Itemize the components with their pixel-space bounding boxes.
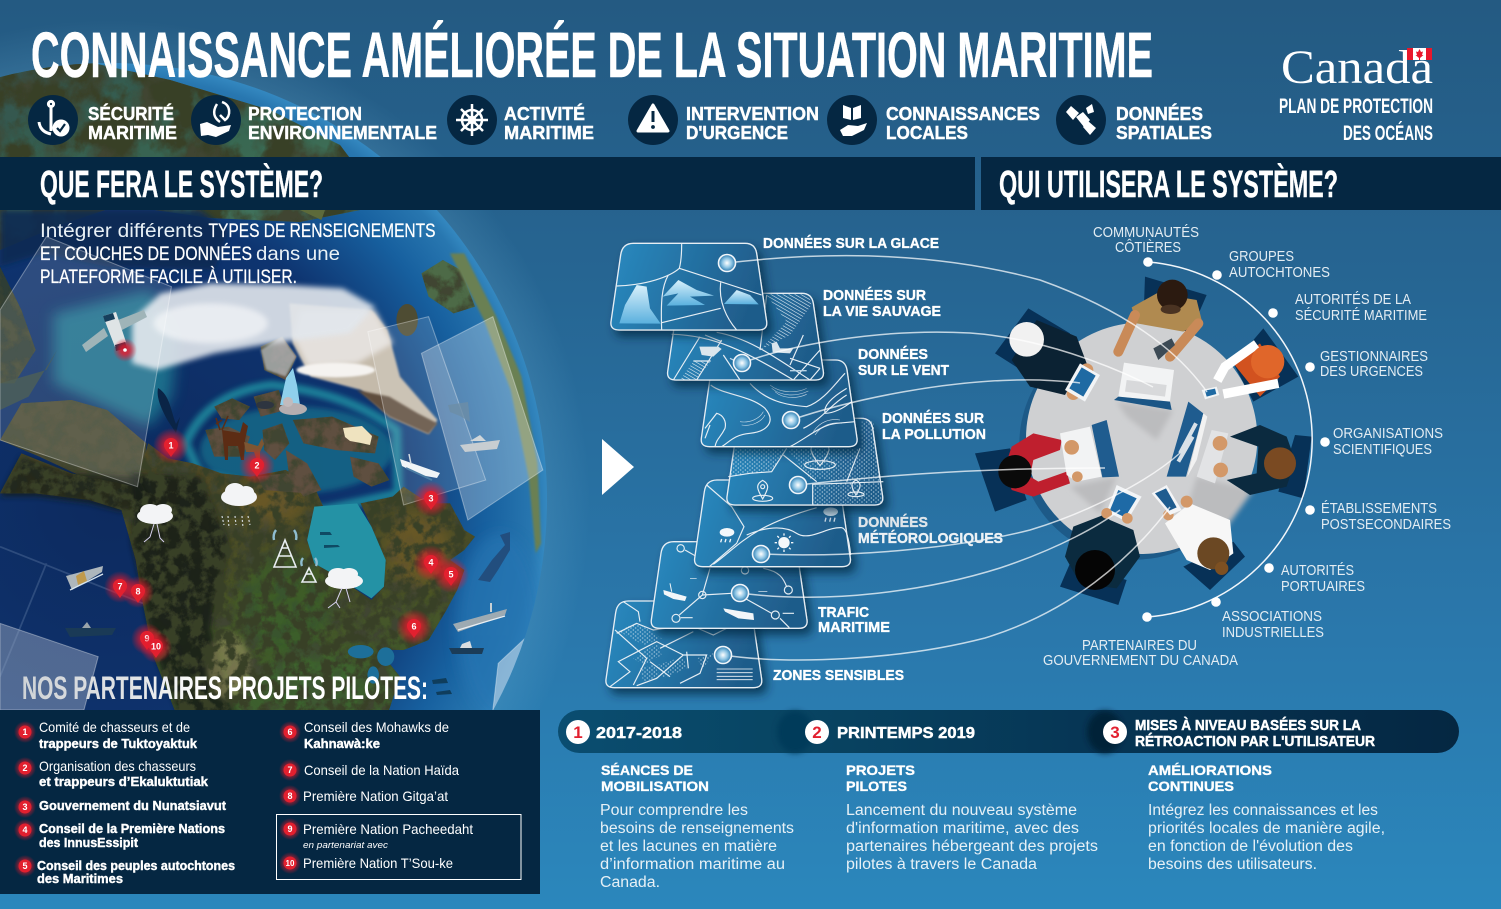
card: données sur le vent <box>701 360 857 447</box>
theme: sécurité maritime <box>28 95 177 145</box>
theme: protection environnementale <box>191 95 437 145</box>
panel: partners list: Première Nation T’Sou-ke <box>303 855 453 871</box>
user labels: COMMUNAUTÉS <box>1093 224 1199 241</box>
step 3: 3 <box>1110 723 1120 742</box>
user labels: INDUSTRIELLES <box>1222 625 1324 641</box>
column: projets pilotes: Lancement du nouveau système <box>846 802 1077 819</box>
theme: activité maritime: MARITIME <box>504 123 594 143</box>
column: séances de mobilisation: MOBILISATION <box>601 778 709 794</box>
panel: partners list: et trappeurs d’Ekaluktutiak <box>39 775 208 789</box>
icon: storm clouds <box>137 483 363 608</box>
logo: Canada wordmark: Canada <box>1281 41 1433 94</box>
layer nodes <box>714 254 806 664</box>
card: trafic maritime <box>651 542 807 628</box>
card: données sur la glace <box>611 243 767 330</box>
step 1: 2017-2018 <box>596 725 682 742</box>
panel: partners list: 2 <box>22 763 28 773</box>
panel: partners list: Organisation des chasseurs <box>39 758 196 774</box>
theme: intervention d'urgence <box>628 95 819 145</box>
column: projets pilotes: partenaires hébergeant des projets <box>846 838 1098 855</box>
theme: activité maritime <box>447 95 594 145</box>
user labels: AUTORITÉS <box>1281 562 1354 579</box>
step 2: PRINTEMPS 2019 <box>837 725 975 742</box>
person: orange hard hat <box>1202 343 1284 399</box>
arrow <box>602 439 634 495</box>
column: améliorations continues: besoins des utilisateurs. <box>1148 856 1317 873</box>
intro text: ET COUCHES DE DONNÉES <box>40 244 252 265</box>
user labels <box>1043 224 1451 669</box>
intro text: Intégrer différents <box>40 221 203 242</box>
person: red sweater <box>998 420 1119 497</box>
step 2: 2 <box>812 723 822 742</box>
panel: partners list: des InnusEssipit <box>39 836 139 850</box>
timeline pill <box>558 710 1459 753</box>
theme: données spatiales <box>1056 95 1212 145</box>
person: black hair <box>1065 485 1142 590</box>
icon: radio towers <box>274 530 317 582</box>
person: white hat officer <box>1009 320 1100 402</box>
column: améliorations continues: priorités locales de manière agile, <box>1148 820 1385 837</box>
step 3: MISES À NIVEAU BASÉES SUR LA <box>1135 717 1361 734</box>
user labels: CÔTIÈRES <box>1115 239 1181 256</box>
column: projets pilotes: PROJETS <box>846 762 915 778</box>
chairs <box>975 277 1312 605</box>
intro text <box>40 221 436 288</box>
banner: que fera le système <box>0 157 975 210</box>
layer labels: LA VIE SAUVAGE <box>823 304 941 320</box>
intro text: TYPES DE RENSEIGNEMENTS <box>208 221 436 242</box>
layer labels: DONNÉES SUR LA GLACE <box>763 235 939 252</box>
card: zones sensibles <box>606 601 762 688</box>
map markers 1 to 10: 2 <box>254 460 260 470</box>
user labels: DES URGENCES <box>1320 364 1423 380</box>
person: dark suit <box>1167 402 1296 495</box>
icon: dark whale arctic <box>158 388 180 433</box>
column: projets pilotes: pilotes à travers le Canada <box>846 856 1037 873</box>
column: projets pilotes: d'information maritime, avec des <box>846 820 1079 837</box>
theme: données spatiales: DONNÉES <box>1116 103 1203 124</box>
panel: partners list: en partenariat avec <box>303 840 389 850</box>
theme: connaissances locales <box>827 95 1040 145</box>
panel: partners list: Gouvernement du Nunatsiavut <box>39 799 227 813</box>
panel: partners list: Première Nation Pacheedaht <box>303 821 473 837</box>
map markers 1 to 10: 1 <box>168 440 174 450</box>
user labels: ASSOCIATIONS <box>1222 609 1322 625</box>
user labels: POSTSECONDAIRES <box>1321 517 1451 533</box>
panel: partners list: 1 <box>22 727 28 737</box>
theme: protection environnementale: ENVIRONNEMENTALE <box>248 123 437 143</box>
panel: partners list: Comité de chasseurs et de <box>39 719 190 735</box>
laptop <box>1114 363 1174 410</box>
person: white shirt <box>1152 485 1233 575</box>
user labels: AUTORITÉS DE LA <box>1295 291 1411 308</box>
icon: walrus and iceberg <box>256 368 307 415</box>
theme: protection environnementale: PROTECTION <box>248 104 362 124</box>
column: améliorations continues: CONTINUES <box>1148 778 1234 794</box>
data layer cards stack <box>606 243 883 688</box>
map markers 1 to 10: 8 <box>135 586 141 596</box>
table <box>1019 323 1257 560</box>
text: plan de protection des océans <box>1279 95 1433 145</box>
panel: partners list: 6 <box>287 727 293 737</box>
globe map of Canada <box>0 44 563 710</box>
panel: partners list: trappeurs de Tuktoyaktuk <box>39 737 197 751</box>
user arc <box>1142 257 1330 622</box>
column: séances de mobilisation: SÉANCES DE <box>601 762 693 778</box>
column: améliorations continues: Intégrez les connaissances et les <box>1148 802 1378 819</box>
card: données sur la vie sauvage <box>668 293 823 380</box>
layer labels: DONNÉES SUR <box>882 410 984 427</box>
layer labels: ZONES SENSIBLES <box>773 668 904 684</box>
step 1: 1 <box>573 723 583 742</box>
column: séances de mobilisation: d’information maritime au <box>600 856 785 873</box>
card: données météorologiques <box>695 480 851 567</box>
user labels: AUTOCHTONES <box>1229 265 1330 281</box>
icon: polar bear <box>343 426 372 445</box>
step 1 <box>566 720 682 744</box>
column: projets pilotes <box>846 762 1098 873</box>
icon: caribou <box>216 416 264 460</box>
layer labels: LA POLLUTION <box>882 427 986 443</box>
user labels: GOUVERNEMENT DU CANADA <box>1043 653 1238 669</box>
layer labels: MARITIME <box>818 620 890 636</box>
layer labels: DONNÉES <box>858 514 928 531</box>
icon: ships <box>65 435 507 654</box>
panel: partners list: 7 <box>287 765 293 775</box>
intro text: PLATEFORME FACILE À UTILISER. <box>40 267 297 288</box>
text: plan de protection des océans: DES OCÉANS <box>1343 122 1433 145</box>
meeting table with users <box>975 277 1312 605</box>
heading: nos partenaires projets pilotes: NOS PARTENAIRES PROJETS PILOTES: <box>22 670 428 706</box>
panel: partners list: Conseil de la Nation Haïda <box>304 762 459 778</box>
panel: partners list: Conseil de la Première Nations <box>39 822 225 836</box>
theme: intervention d'urgence: D'URGENCE <box>686 123 788 143</box>
user labels: ÉTABLISSEMENTS <box>1321 500 1437 517</box>
user labels: ORGANISATIONS <box>1333 426 1443 442</box>
column: séances de mobilisation: Pour comprendre les <box>600 802 748 819</box>
panel: partners list: Kahnawà:ke <box>304 737 380 751</box>
map markers 1 to 10: 4 <box>428 558 434 568</box>
panel: partners list <box>0 710 540 894</box>
panel: partners list: des Maritimes <box>37 872 123 886</box>
intro text: dans une <box>256 244 340 265</box>
map markers 1 to 10: 3 <box>428 494 434 504</box>
panel: partners list: 8 <box>287 791 293 801</box>
person: tan shirt <box>1118 280 1202 360</box>
layer labels: DONNÉES SUR <box>823 287 927 304</box>
column: améliorations continues <box>1148 762 1385 873</box>
column: séances de mobilisation: besoins de renseignements <box>600 820 794 837</box>
icon: whales and fish <box>320 402 510 695</box>
map markers 1 to 10: 9 <box>144 634 150 644</box>
step 3 <box>1103 717 1376 750</box>
layer labels: MÉTÉOROLOGIQUES <box>858 530 1003 547</box>
panel: partners list: 5 <box>22 861 28 871</box>
user labels: PORTUAIRES <box>1281 579 1365 595</box>
card: données sur la pollution <box>727 418 883 505</box>
banner: que fera le système: QUE FERA LE SYSTÈME? <box>40 162 323 206</box>
column: améliorations continues: en fonction de l'évolution des <box>1148 838 1353 855</box>
panel: partners list: Conseil des peuples autochtones <box>37 859 235 873</box>
column: projets pilotes: PILOTES <box>846 778 907 794</box>
panel: partners list: 3 <box>22 802 28 812</box>
theme: sécurité maritime: MARITIME <box>88 123 177 143</box>
user labels: GESTIONNAIRES <box>1320 349 1428 365</box>
column: séances de mobilisation: Canada. <box>600 874 660 891</box>
layer labels <box>763 235 1003 684</box>
theme: intervention d'urgence: INTERVENTION <box>686 104 819 124</box>
column: séances de mobilisation: et les lacunes en matière <box>600 838 777 855</box>
user labels: PARTENAIRES DU <box>1082 638 1197 654</box>
user labels: SCIENTIFIQUES <box>1333 442 1432 458</box>
theme: sécurité maritime: SÉCURITÉ <box>88 103 174 124</box>
panel: partners list: 4 <box>22 825 28 835</box>
map markers 1 to 10: 5 <box>448 570 454 580</box>
user labels: SÉCURITÉ MARITIME <box>1295 307 1427 324</box>
column: améliorations continues: AMÉLIORATIONS <box>1148 762 1272 778</box>
panel: partners list: 9 <box>287 824 293 834</box>
map markers 1 to 10: 6 <box>411 622 417 632</box>
theme: données spatiales: SPATIALES <box>1116 123 1212 143</box>
step 2 <box>805 720 975 744</box>
layer labels: TRAFIC <box>818 605 869 621</box>
column: séances de mobilisation <box>600 762 794 891</box>
theme: connaissances locales: CONNAISSANCES <box>886 104 1040 124</box>
layer labels: SUR LE VENT <box>858 363 949 379</box>
theme: connaissances locales: LOCALES <box>886 123 968 143</box>
theme: activité maritime: ACTIVITÉ <box>504 103 585 124</box>
map markers 1 to 10: 7 <box>117 582 123 592</box>
step 3: RÉTROACTION PAR L'UTILISATEUR <box>1135 733 1376 750</box>
panel: partners list: 10 <box>286 859 295 868</box>
data lines from layers to users <box>723 256 1207 660</box>
map markers 1 to 10 <box>104 428 469 663</box>
layer labels: DONNÉES <box>858 346 928 363</box>
map markers 1 to 10: 10 <box>151 642 161 652</box>
panel: partners list: Conseil des Mohawks de <box>304 719 449 735</box>
icon: satellite <box>82 310 147 362</box>
panel: partners list: Première Nation Gitga’at <box>303 788 448 804</box>
user labels: GROUPES <box>1229 249 1294 265</box>
